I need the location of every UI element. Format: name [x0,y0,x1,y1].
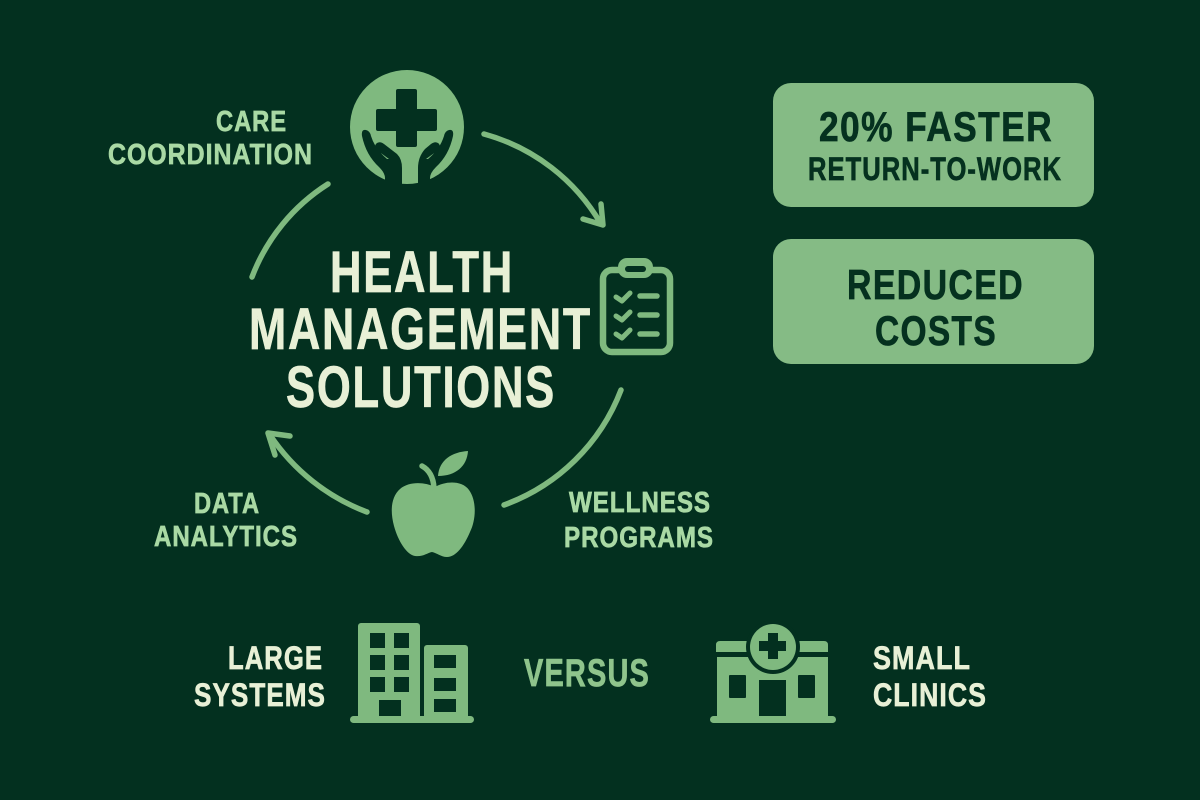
icon: clipboard checklist [603,258,670,352]
title: HEALTH [330,240,514,305]
stat card: reduced costs: COSTS [875,307,997,354]
label: small clinics [873,640,987,713]
title [249,240,592,420]
arrow: clipboard to apple [504,390,621,505]
arrow: apple to data analytics [268,433,367,512]
stat card: faster return to work: RETURN-TO-WORK [808,151,1062,187]
label: data analytics: ANALYTICS [154,521,298,553]
label: large systems: LARGE [228,640,323,676]
label: care coordination [108,106,313,171]
stat card: faster return to work: 20% FASTER [819,103,1053,150]
label: wellness programs: PROGRAMS [564,522,714,554]
stat card: reduced costs: REDUCED [847,261,1024,308]
label: data analytics: DATA [194,488,260,520]
title: MANAGEMENT [249,297,592,362]
arrow: data analytics to care coordination [252,184,328,277]
title: SOLUTIONS [286,355,556,420]
icon: large hospital buildings [350,623,474,723]
label: large systems [194,640,326,713]
label: care coordination: CARE [216,106,287,138]
label: large systems: SYSTEMS [194,677,326,713]
icon: cross and caring hands [350,70,464,186]
label: care coordination: COORDINATION [108,139,313,171]
label: wellness programs [564,487,714,554]
label: versus: VERSUS [524,652,650,695]
label: data analytics [154,488,298,553]
icon: small clinic [710,620,836,723]
label: small clinics: CLINICS [873,677,987,713]
label: wellness programs: WELLNESS [569,487,711,519]
arrow: care coordination to wellness programs [484,134,603,225]
label: small clinics: SMALL [873,640,971,676]
stat card: reduced costs [773,239,1094,364]
icon: apple [392,451,475,557]
stat card: faster return to work [773,83,1094,207]
